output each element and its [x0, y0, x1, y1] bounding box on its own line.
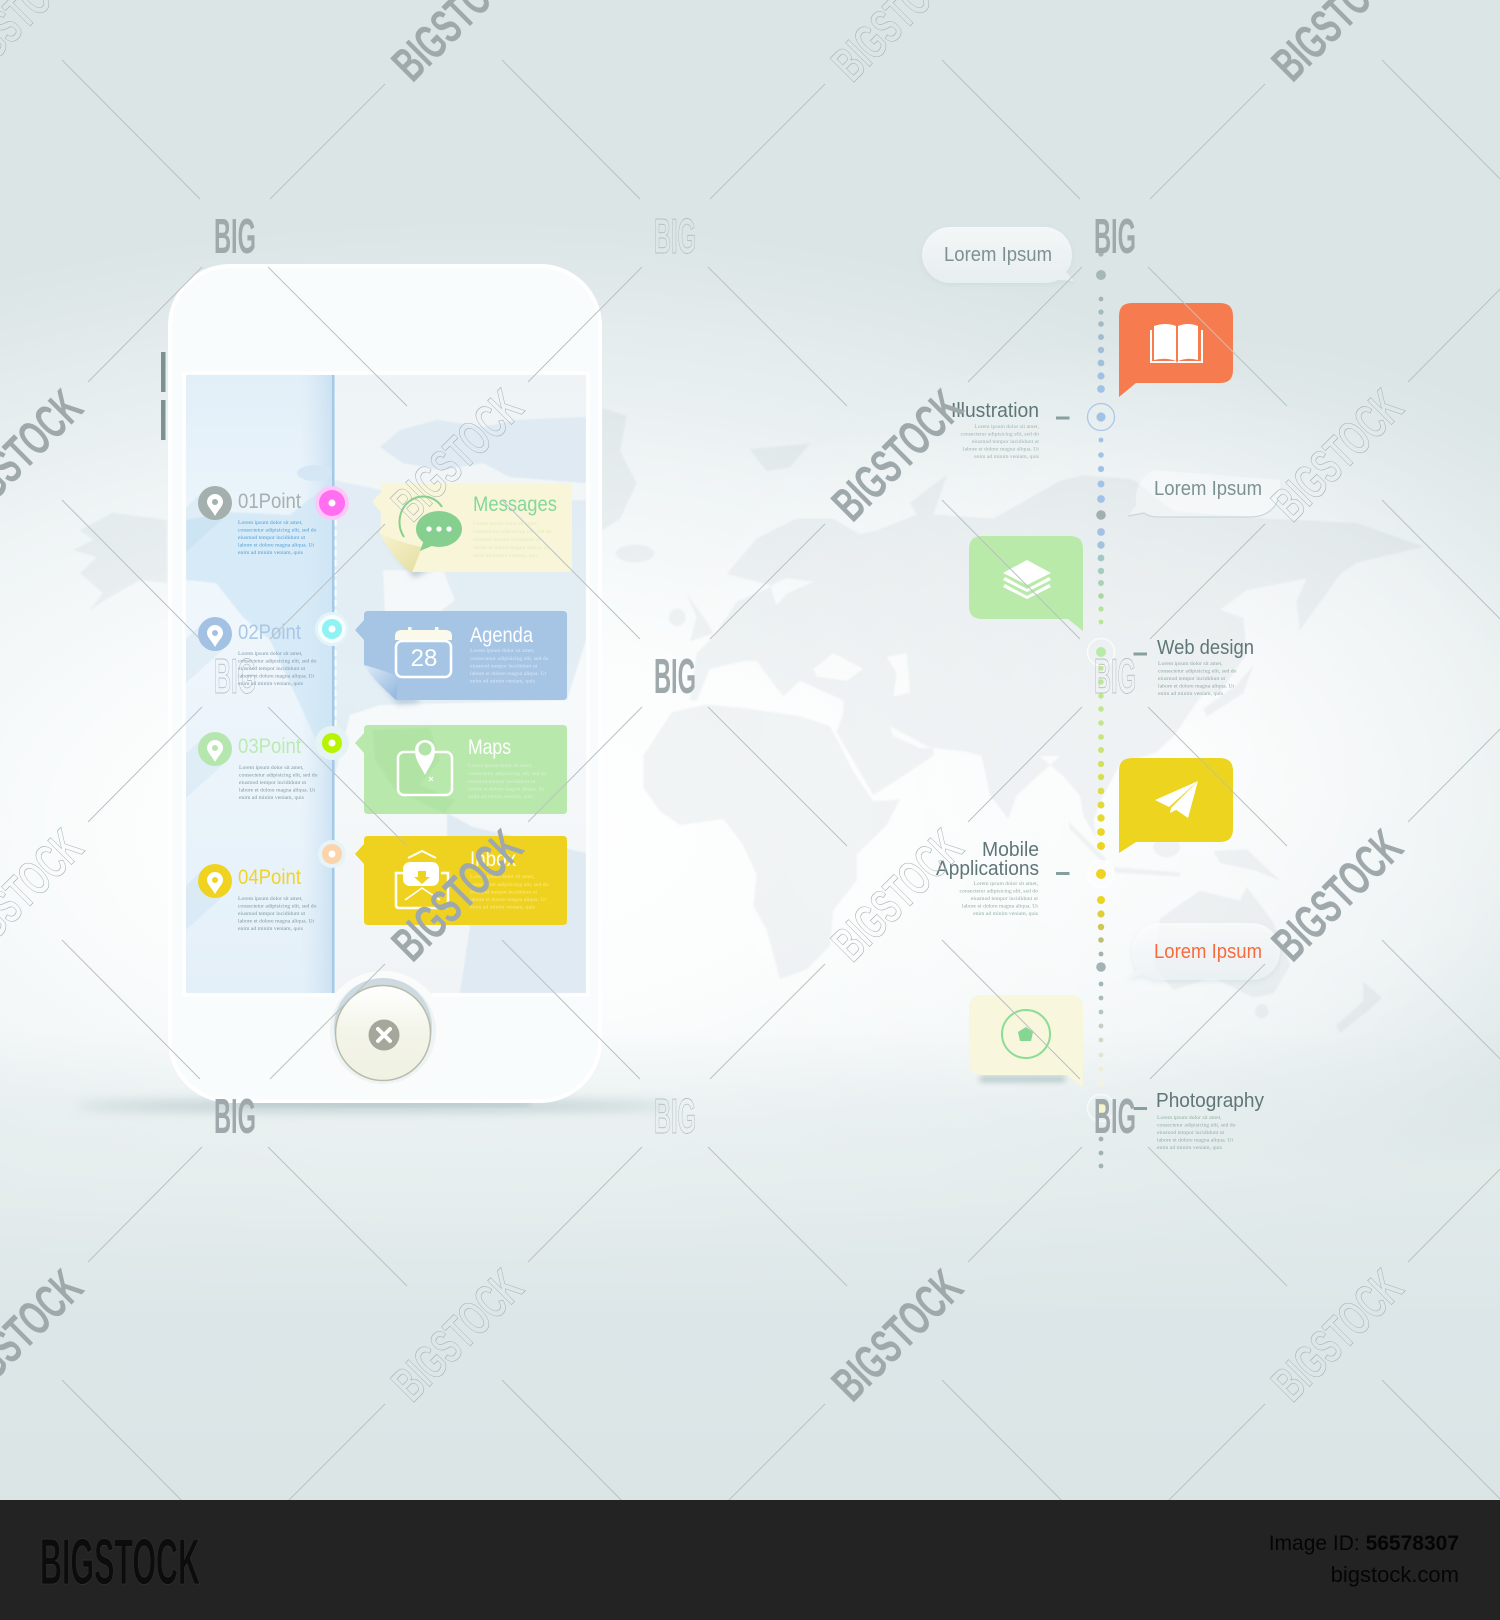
text block: point 02: consectetur adipisicing elit, sed do: [238, 658, 317, 664]
timeline dot 02: [315, 612, 349, 646]
point 01: [198, 486, 317, 556]
text block: Maps: eiusmod tempor incididunt ut: [468, 779, 536, 785]
text block: Agenda: eiusmod tempor incididunt ut: [470, 664, 538, 670]
watermark overlay: BIG: [214, 210, 256, 264]
card: Maps: [355, 725, 567, 814]
heading: Applications: [936, 857, 1039, 880]
point 02: [198, 617, 317, 687]
text block: point 04: labore et dolore magna aliqua. Ut: [238, 918, 315, 924]
label: Web design: [1134, 636, 1254, 697]
text block: enim ad minim veniam, quis: [1158, 691, 1224, 697]
watermark overlay: BIG: [1094, 1090, 1136, 1144]
text block: Maps: enim ad minim veniam, quis: [468, 794, 534, 800]
text block: Maps: Lorem ipsum dolor sit amet,: [468, 763, 533, 769]
watermark overlay: BIGSTOCK: [1262, 380, 1413, 531]
timeline node: Photography: [1088, 1094, 1114, 1122]
label: Lorem Ipsum: [1154, 478, 1262, 500]
text block: point 03: eiusmod tempor incididunt ut: [239, 780, 307, 786]
text block: Inbox: [470, 874, 549, 910]
text block: labore et dolore magna aliqua. Ut: [1158, 684, 1235, 690]
icon: calendar: 28: [411, 645, 437, 672]
heading: Photography: [1156, 1089, 1265, 1112]
text block: Inbox: consectetur adipisicing elit, sed do: [470, 882, 549, 888]
heading: Inbox: Inbox: [470, 848, 516, 871]
text block: Maps: [468, 763, 547, 800]
icon: map pin: ×: [428, 774, 434, 784]
text block: point 01: [238, 520, 317, 556]
text block: Agenda: consectetur adipisicing elit, sed do: [470, 656, 549, 662]
bubble: Lorem Ipsum top: [922, 227, 1074, 283]
text block: labore et dolore magna aliqua. Ut: [962, 904, 1038, 910]
watermark overlay: BIGSTOCK: [822, 1260, 973, 1411]
phone volume buttons: [161, 352, 166, 440]
screen divider: [332, 375, 334, 993]
text block: Agenda: labore et dolore magna aliqua. Ut: [470, 671, 547, 677]
text block: point 03: [239, 765, 318, 801]
text block: Messages: enim ad minim veniam, quis: [473, 553, 539, 559]
speech card: layers: [969, 536, 1083, 631]
phone: [161, 266, 600, 1101]
heading: 03Point: 03Point: [238, 735, 301, 758]
text block: point 03: consectetur adipisicing elit, sed do: [239, 772, 318, 778]
icon: pin 03: [198, 732, 232, 766]
world map: [73, 408, 1423, 1033]
text block: Agenda: enim ad minim veniam, quis: [470, 678, 536, 684]
screen map: [186, 417, 586, 993]
watermark overlay: BIG: [214, 1090, 256, 1144]
bubble: Lorem Ipsum middle: [1128, 470, 1280, 517]
watermark overlay: BIGSTOCK: [382, 820, 533, 971]
heading: Maps: Maps: [468, 736, 511, 759]
watermark overlay: BIG: [654, 650, 696, 704]
icon: pin 02: [198, 617, 232, 651]
text block: Lorem ipsum dolor sit amet,: [974, 424, 1040, 430]
watermark overlay: BIG: [214, 650, 256, 704]
text block: Lorem ipsum dolor sit amet,: [1158, 661, 1223, 667]
icon: paper plane: [1155, 781, 1198, 818]
text block: eiusmod tempor incididunt ut: [1157, 1130, 1225, 1136]
text block: point 04: enim ad minim veniam, quis: [238, 926, 304, 932]
watermark overlay: BIG: [654, 1090, 696, 1144]
text block: consectetur adipisicing elit, sed do: [1157, 1122, 1236, 1128]
footer bar: BIGSTOCK: [40, 1525, 200, 1598]
image id: Image ID: 56578307: [1269, 1532, 1459, 1555]
icon: map pin: [398, 740, 452, 795]
watermark overlay: BIGSTOCK: [822, 380, 973, 531]
card: Agenda: [355, 611, 567, 705]
heading: Web design: [1157, 636, 1254, 659]
text block: point 02: Lorem ipsum dolor sit amet,: [238, 651, 303, 657]
heading: Mobile: [982, 838, 1039, 861]
label: Lorem Ipsum: [1154, 941, 1262, 963]
icon: inbox envelope: [396, 851, 448, 908]
watermark overlay: BIGSTOCK: [382, 1260, 533, 1411]
text block: Lorem ipsum dolor sit amet,: [1157, 1115, 1222, 1121]
heading: [936, 838, 1039, 880]
watermark overlay: BIGSTOCK: [1262, 1260, 1413, 1411]
text block: point 03: labore et dolore magna aliqua. Ut: [239, 788, 316, 794]
timeline node: Illustration: [1088, 404, 1114, 430]
timeline node: Mobile Applications: [1088, 860, 1114, 888]
text block: point 04: eiusmod tempor incididunt ut: [238, 911, 306, 917]
timeline node: Web design: [1088, 638, 1114, 666]
watermark overlay: BIG: [1094, 210, 1136, 264]
icon: chat bubble: [400, 496, 462, 551]
watermark overlay: BIG: [654, 210, 696, 264]
icon: lens: [1002, 1010, 1050, 1058]
timeline dot 01: [315, 486, 349, 520]
text block: enim ad minim veniam, quis: [1157, 1145, 1223, 1151]
text block: point 04: [238, 896, 317, 932]
text block: enim ad minim veniam, quis: [974, 454, 1040, 460]
text block: labore et dolore magna aliqua. Ut: [1157, 1138, 1234, 1144]
card: Inbox: [355, 836, 567, 925]
heading: 01Point: 01Point: [238, 490, 301, 513]
text block: enim ad minim veniam, quis: [973, 911, 1039, 917]
phone screen: [186, 375, 586, 993]
text block: point 03: Lorem ipsum dolor sit amet,: [239, 765, 304, 771]
icon: calendar: [395, 627, 452, 677]
site url: bigstock.com: [1331, 1562, 1459, 1587]
text block: Messages: Lorem ipsum dolor sit amet,: [473, 521, 538, 527]
text block: point 01: labore et dolore magna aliqua. Ut: [238, 542, 315, 548]
icon: pin 01: [198, 486, 232, 520]
text block: Inbox: Lorem ipsum dolor sit amet,: [470, 874, 535, 880]
page curl: [380, 533, 422, 573]
text block: point 02: eiusmod tempor incididunt ut: [238, 666, 306, 672]
text block: point 01: Lorem ipsum dolor sit amet,: [238, 520, 303, 526]
watermark overlay: BIGSTOCK: [382, 380, 533, 531]
page curl: [364, 665, 399, 700]
text block: Messages: consectetur adipisicing elit, sed do: [473, 529, 552, 535]
text block: Messages: [473, 521, 552, 559]
text block: Messages: labore et dolore magna aliqua. Ut: [473, 545, 550, 551]
text block: Inbox: labore et dolore magna aliqua. Ut: [470, 897, 547, 903]
text block: [960, 424, 1040, 460]
text block: Agenda: [470, 648, 549, 684]
heading: Illustration: [951, 399, 1039, 422]
text block: Maps: consectetur adipisicing elit, sed do: [468, 771, 547, 777]
watermark overlay: BIGSTOCK: [1262, 820, 1413, 971]
text block: [1157, 1115, 1236, 1151]
heading: 04Point: 04Point: [238, 866, 301, 889]
speech card: paper plane: [1119, 758, 1233, 853]
bubble: Lorem Ipsum lower: [1128, 923, 1280, 980]
text block: point 04: consectetur adipisicing elit, sed do: [238, 904, 317, 910]
heading: Agenda: Agenda: [470, 624, 533, 647]
timeline dots: [1096, 251, 1106, 1168]
point 04: [198, 864, 317, 932]
text block: point 02: enim ad minim veniam, quis: [238, 681, 304, 687]
speech card: book: [1119, 303, 1233, 397]
text block: consectetur adipisicing elit, sed do: [960, 888, 1038, 894]
connector dash: [1134, 652, 1147, 656]
text block: eiusmod tempor incididunt ut: [972, 439, 1039, 445]
text block: point 04: Lorem ipsum dolor sit amet,: [238, 896, 303, 902]
heading: 02Point: 02Point: [238, 621, 301, 644]
text block: [1158, 661, 1237, 697]
point 03: [198, 732, 318, 801]
text block: point 01: consectetur adipisicing elit, sed do: [238, 528, 317, 534]
card: Messages: [372, 483, 572, 578]
pin long shadows: [186, 491, 227, 930]
speech card: photo: [969, 995, 1083, 1087]
text block: point 03: enim ad minim veniam, quis: [239, 795, 305, 801]
text block: Inbox: eiusmod tempor incididunt ut: [470, 890, 538, 896]
text block: Inbox: enim ad minim veniam, quis: [470, 904, 536, 910]
icon: pin 04: [198, 864, 232, 898]
text block: point 02: [238, 651, 317, 687]
screen inner frame: [184, 373, 588, 995]
timeline dot 03: [315, 726, 349, 760]
connector dash: [1056, 416, 1070, 420]
phone body: [170, 266, 600, 1101]
text block: [960, 881, 1039, 917]
heading: Messages: Messages: [473, 493, 557, 516]
footer bar: [0, 1500, 1500, 1620]
label: Lorem Ipsum: [944, 244, 1052, 266]
home button: [321, 971, 445, 1095]
connector dash: [1134, 1107, 1147, 1110]
text block: consectetur adipisicing elit, sed do: [960, 432, 1039, 438]
text block: point 01: eiusmod tempor incididunt ut: [238, 535, 306, 541]
text block: Maps: labore et dolore magna aliqua. Ut: [468, 786, 545, 792]
text block: Lorem ipsum dolor sit amet,: [973, 881, 1039, 887]
icon: book: [1150, 324, 1203, 363]
text block: eiusmod tempor incididunt ut: [971, 896, 1038, 902]
connector dash: [1056, 872, 1070, 875]
phone shadow: [75, 1101, 675, 1111]
label: Mobile Applications: [936, 838, 1070, 917]
watermark overlay: BIG: [1094, 650, 1136, 704]
text block: eiusmod tempor incididunt ut: [1158, 676, 1226, 682]
text block: point 01: enim ad minim veniam, quis: [238, 550, 304, 556]
timeline dot 04: [318, 840, 346, 868]
watermark overlay: BIGSTOCK: [822, 820, 973, 971]
text block: point 02: labore et dolore magna aliqua. Ut: [238, 674, 315, 680]
text block: consectetur adipisicing elit, sed do: [1158, 668, 1237, 674]
icon: layers: [1003, 560, 1051, 599]
text block: labore et dolore magna aliqua. Ut: [963, 446, 1039, 452]
text block: Messages: eiusmod tempor incididunt ut: [473, 537, 541, 543]
label: Photography: [1134, 1089, 1265, 1151]
icon: close: [368, 1020, 400, 1050]
label: Illustration: [951, 399, 1070, 460]
text block: Agenda: Lorem ipsum dolor sit amet,: [470, 648, 535, 654]
